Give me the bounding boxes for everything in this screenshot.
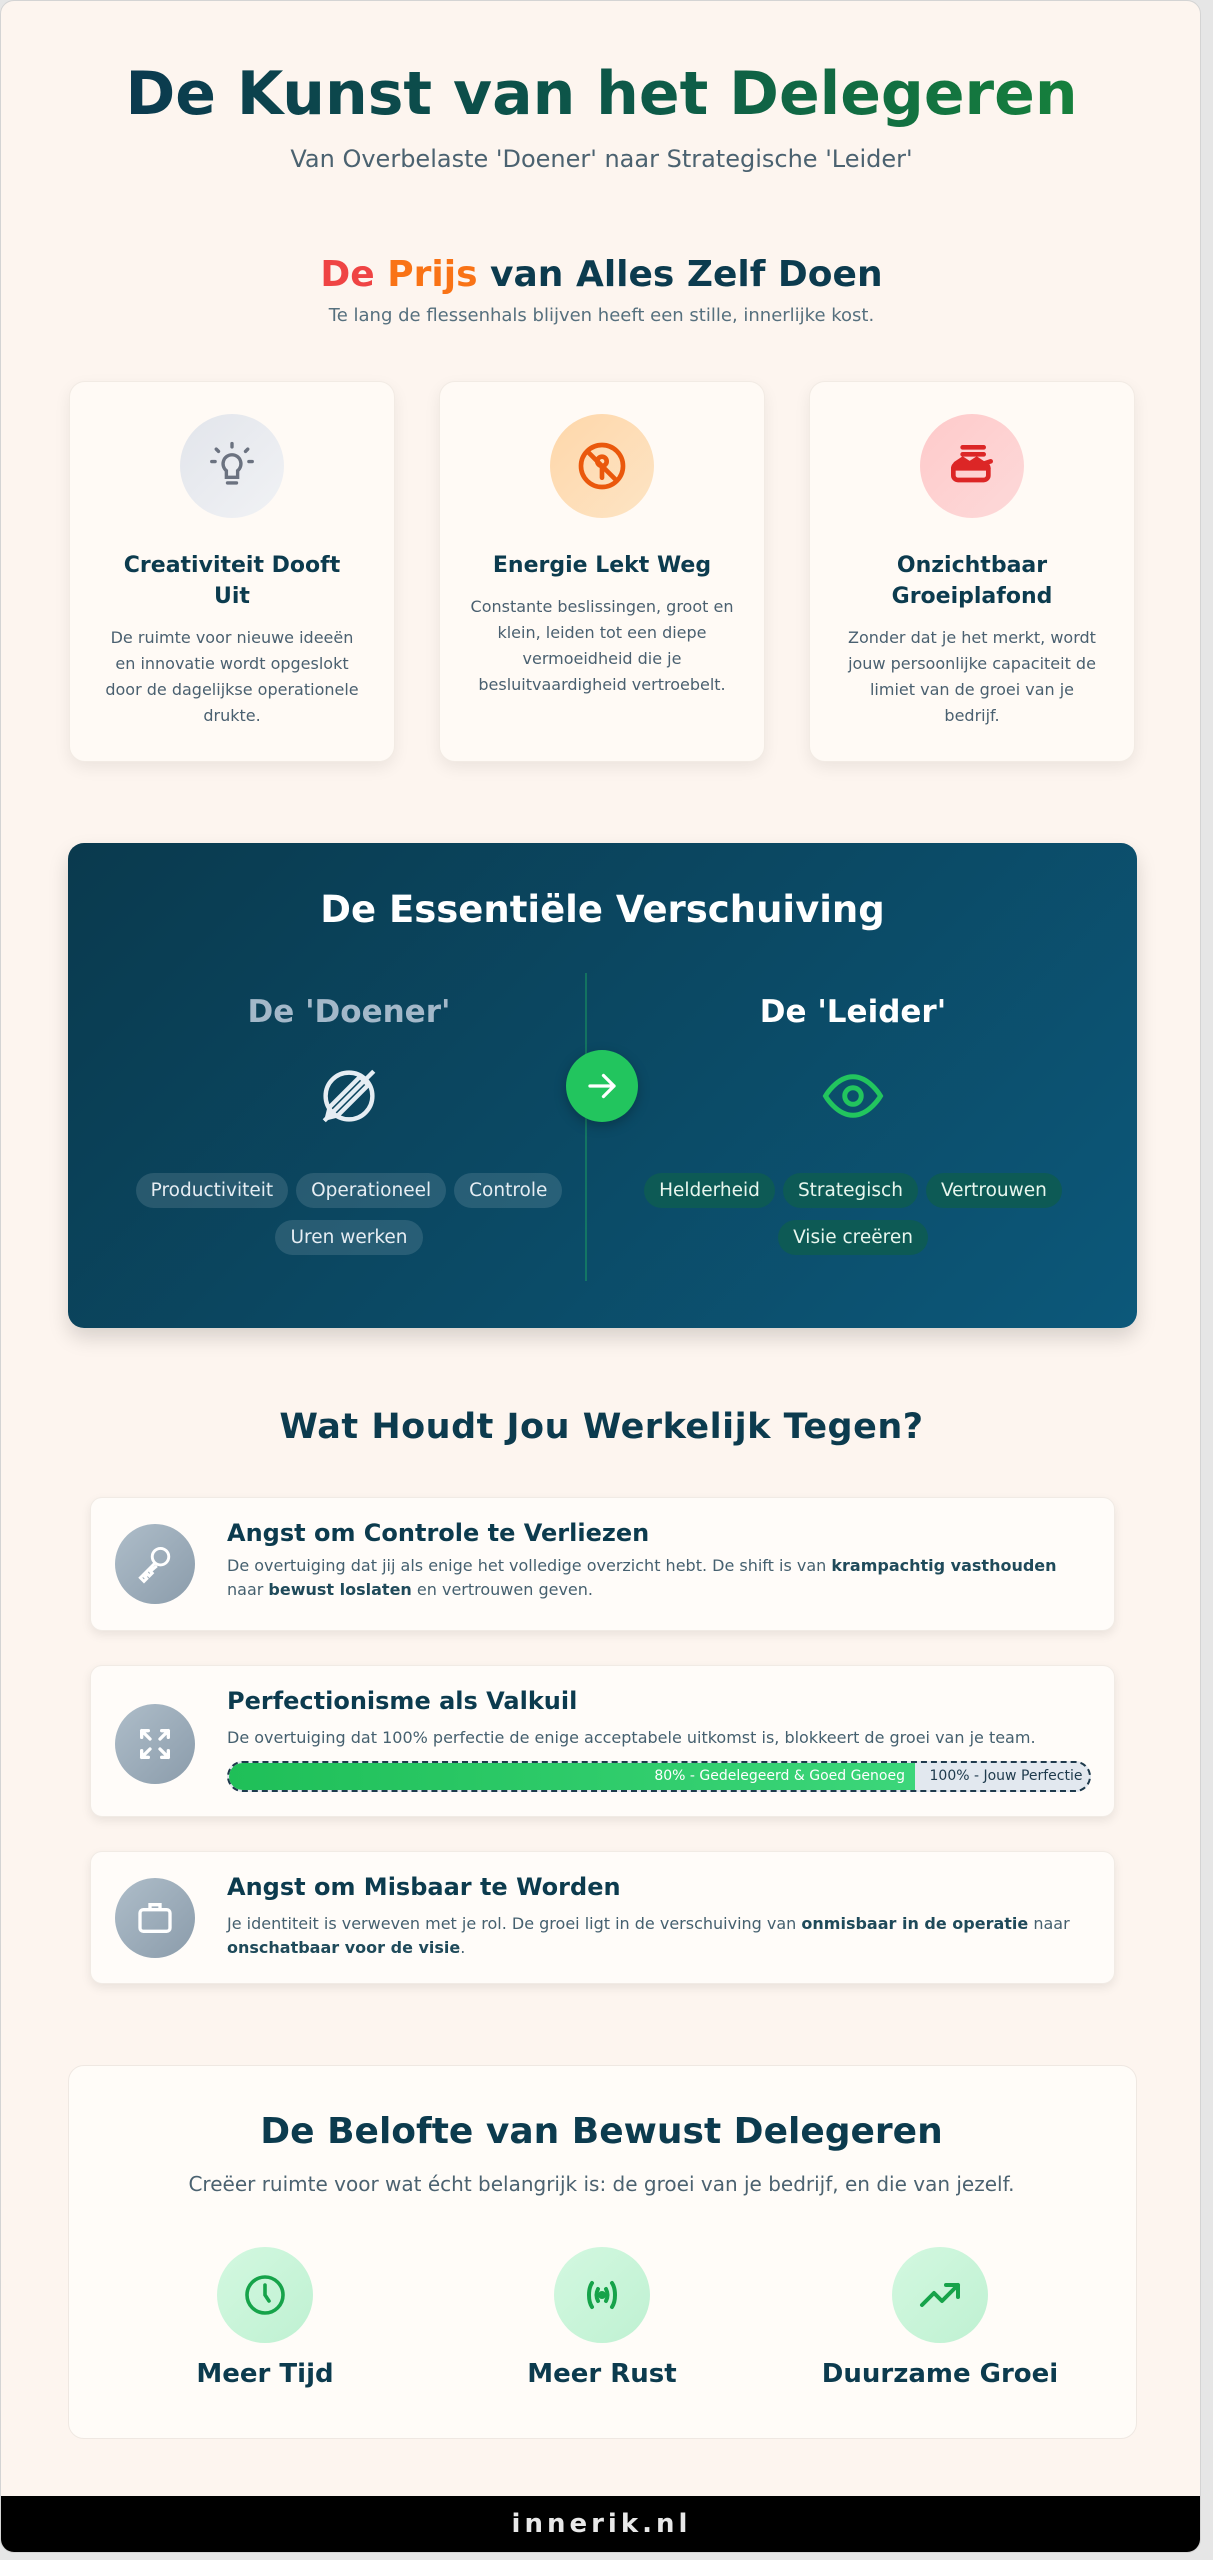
icon: eye	[822, 1074, 884, 1118]
panel: verschuiving	[68, 843, 1137, 1328]
problem card: controle: Angst om Controle te Verliezen	[227, 1519, 649, 1547]
panel title: De Essentiële Verschuiving	[320, 888, 885, 931]
title: De Kunst van het Delegeren	[125, 59, 1078, 129]
icon: clock	[217, 2247, 313, 2343]
card: Groeiplafond	[809, 381, 1135, 762]
card: Groeiplafond: Zonder dat je het merkt, wordt jouw persoonlijke capaciteit de limiet van de groei van je bedrijf.	[848, 628, 1096, 725]
problem card: perfectionisme	[90, 1665, 1115, 1817]
tags: doener: Operationeel	[311, 1180, 431, 1201]
icon: energy	[550, 414, 654, 518]
problem card: misbaar: Angst om Misbaar te Worden	[227, 1873, 621, 1901]
heading: Doener: De 'Doener'	[248, 994, 450, 1030]
label: Meer Tijd: Meer Tijd	[196, 2359, 334, 2389]
tags: leider: Vertrouwen	[941, 1180, 1047, 1201]
card: Energie	[439, 381, 765, 762]
tags: doener: Controle	[469, 1180, 547, 1201]
heading: Wat Houdt: Wat Houdt Jou Werkelijk Tegen?	[279, 1407, 924, 1447]
progress bar: 80% - Gedelegeerd & Goed Genoeg	[654, 1768, 905, 1784]
panel: belofte	[68, 2065, 1137, 2439]
card: Creativiteit	[69, 381, 395, 762]
problem card: misbaar	[90, 1851, 1115, 1984]
card: Creativiteit: Creativiteit Dooft Uit	[124, 553, 340, 609]
icon: lightbulb	[180, 414, 284, 518]
icon: key	[115, 1524, 195, 1604]
icon: briefcase	[115, 1878, 195, 1958]
problem card: controle	[90, 1497, 1115, 1631]
problem card: perfectionisme: De overtuiging dat 100% perfectie de enige acceptabele uitkomst is, blokkeert de groei van je team.	[227, 1728, 1036, 1747]
heading: Leider: De 'Leider'	[760, 994, 946, 1030]
tags: leider: Strategisch	[798, 1180, 903, 1201]
divider	[585, 973, 587, 1281]
icon: ceiling	[920, 414, 1024, 518]
tags: leider: Visie creëren	[793, 1227, 913, 1248]
problem card: misbaar: Je identiteit is verweven met je rol. De groei ligt in de verschuiving van onmisbaar in de operatie naar onschatbaar voor de visie.	[227, 1914, 1070, 1956]
footer: innerik.nl	[512, 2509, 691, 2539]
card: Creativiteit: De ruimte voor nieuwe ideeën en innovatie wordt opgeslokt door de dagelijkse operationele drukte.	[105, 628, 359, 725]
icon: doener	[322, 1070, 376, 1122]
heading: belofte: De Belofte van Bewust Delegeren	[260, 2111, 943, 2152]
label: Duurzame Groei: Duurzame Groei	[822, 2359, 1058, 2389]
belofte subtitle: Creëer ruimte voor wat écht belangrijk is: de groei van je bedrijf, en die van jezelf.	[188, 2172, 1015, 2196]
subheading: Te lang de flessenhals blijven heeft een stille, innerlijke kost.	[329, 305, 874, 326]
card: Groeiplafond: Onzichtbaar Groeiplafond	[892, 553, 1052, 609]
arrow	[566, 1050, 638, 1122]
tags: leider: Helderheid	[659, 1180, 760, 1201]
tags: leider	[644, 1173, 1062, 1255]
progress bar: 100% - Jouw Perfectie	[930, 1768, 1082, 1784]
footer	[1, 2496, 1202, 2554]
tags: doener: Productiviteit	[151, 1180, 273, 1201]
progress bar	[227, 1761, 1091, 1792]
heading: De Prijs: De Prijs van Alles Zelf Doen	[320, 254, 883, 295]
icon: growth	[892, 2247, 988, 2343]
icon: calm	[554, 2247, 650, 2343]
icon: expand	[115, 1704, 195, 1784]
card: Energie: Constante beslissingen, groot en klein, leiden tot een diepe vermoeidheid die je besluitvaardigheid vertroebelt.	[471, 597, 733, 694]
tags: doener: Uren werken	[290, 1227, 408, 1248]
label: Meer Rust: Meer Rust	[527, 2359, 677, 2389]
card: Energie: Energie Lekt Weg	[493, 553, 711, 578]
tags: doener	[136, 1173, 562, 1255]
problem card: controle: De overtuiging dat jij als enige het volledige overzicht hebt. De shift is van krampachtig vasthouden naar bewust loslaten en vertrouwen geven.	[227, 1556, 1057, 1598]
problem card: perfectionisme: Perfectionisme als Valkuil	[227, 1687, 577, 1715]
subtitle: Van Overbelaste 'Doener' naar Strategische 'Leider'	[290, 145, 913, 173]
